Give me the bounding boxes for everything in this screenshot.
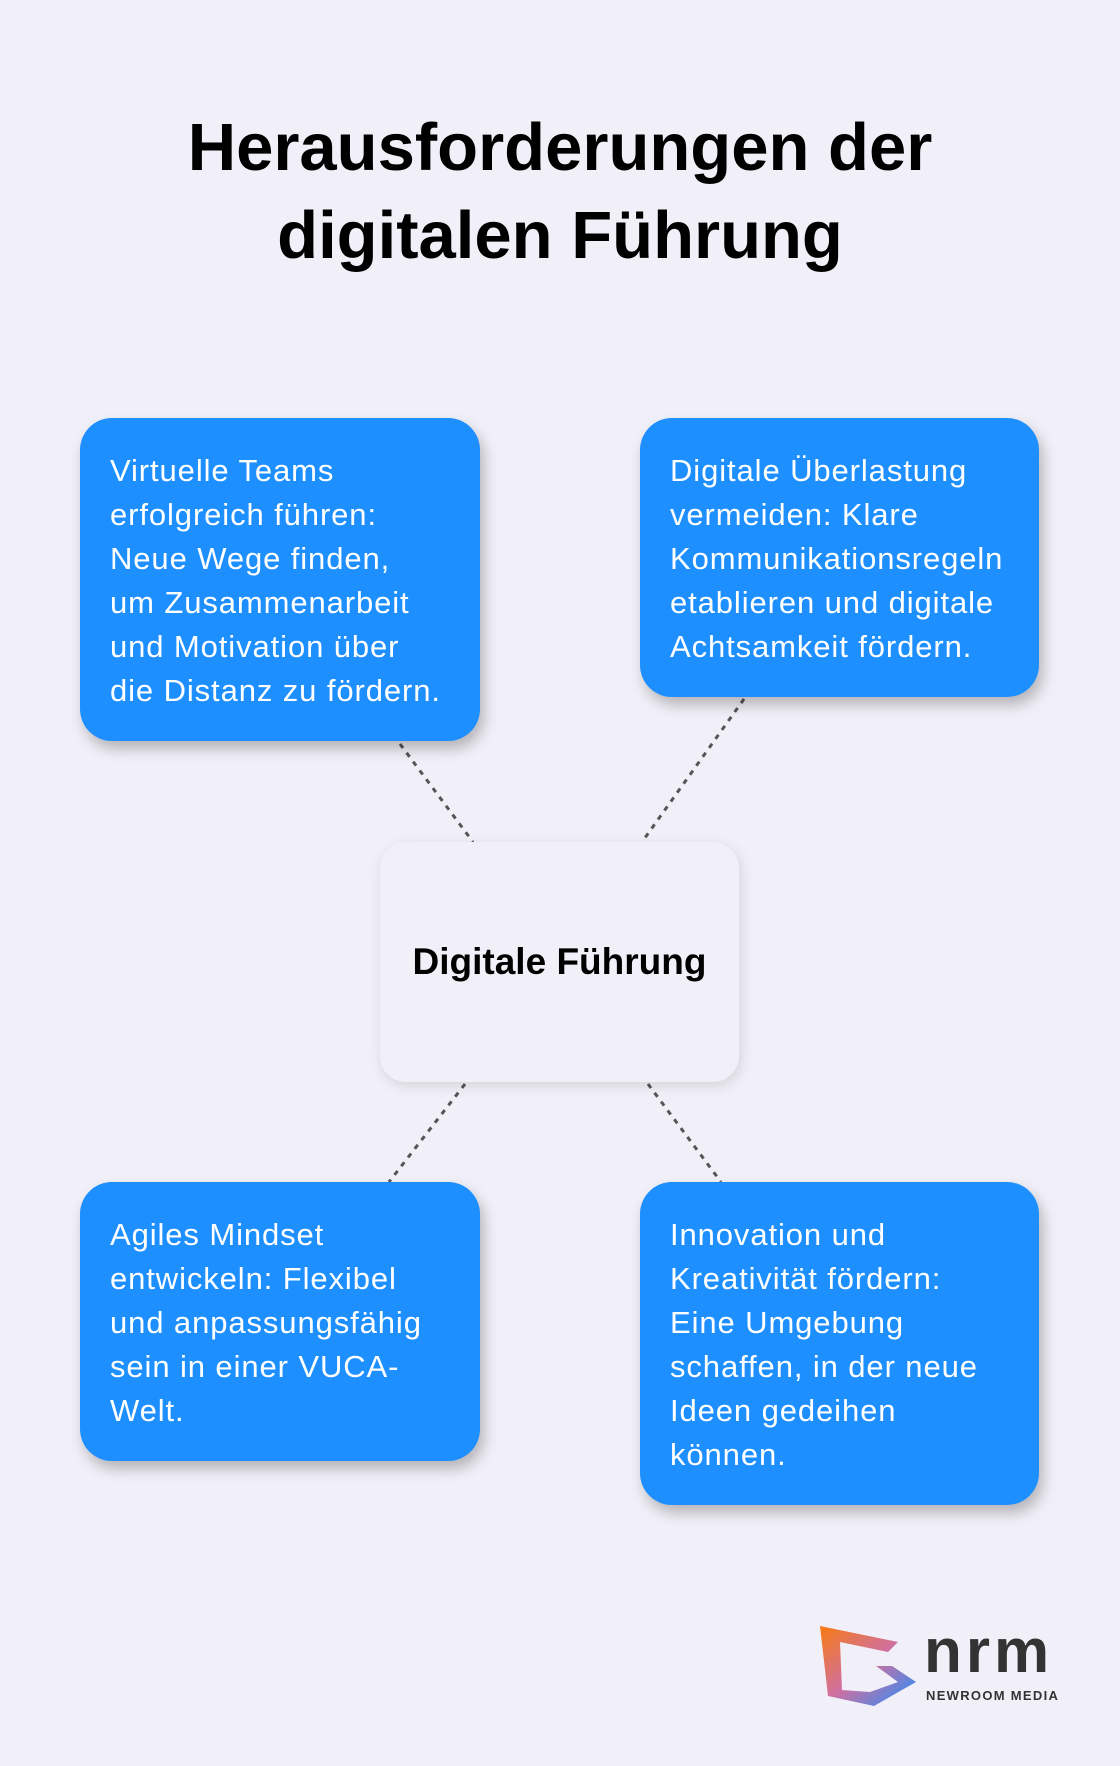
panel: digital overload: vermeiden: Klare (670, 497, 919, 532)
panel: virtual teams: Virtuelle Teams (110, 453, 334, 488)
panel: innovation: Kreativität fördern: (670, 1261, 941, 1296)
panel: innovation: Innovation und (670, 1217, 886, 1252)
panel: virtual teams: Neue Wege finden, (110, 541, 390, 576)
title: digitalen Führung (277, 198, 843, 273)
panel: agile mindset: Welt. (110, 1393, 185, 1428)
panel: innovation (640, 1182, 1039, 1505)
panel: virtual teams: die Distanz zu fördern. (110, 673, 441, 708)
panel: digital overload: Kommunikationsregeln (670, 541, 1003, 576)
panel: virtual teams: um Zusammenarbeit (110, 585, 410, 620)
title: Herausforderungen der (188, 110, 932, 185)
panel: digital overload (640, 418, 1039, 697)
panel: innovation: schaffen, in der neue (670, 1349, 978, 1384)
panel: digital overload: etablieren und digitale (670, 585, 994, 620)
panel: digital overload: Achtsamkeit fördern. (670, 629, 972, 664)
panel: innovation: können. (670, 1437, 787, 1472)
logo (820, 1617, 1059, 1706)
panel: agile mindset: und anpassungsfähig (110, 1305, 422, 1340)
panel: agile mindset: entwickeln: Flexibel (110, 1261, 397, 1296)
panel: agile mindset (80, 1182, 480, 1461)
panel: virtual teams: erfolgreich führen: (110, 497, 377, 532)
panel: innovation: Ideen gedeihen (670, 1393, 896, 1428)
panel: agile mindset: sein in einer VUCA- (110, 1349, 399, 1384)
center node (380, 842, 739, 1082)
center node: Digitale Führung (413, 941, 706, 982)
panel: digital overload: Digitale Überlastung (670, 453, 967, 488)
panel: virtual teams: und Motivation über (110, 629, 399, 664)
logo: NEWROOM MEDIA (926, 1688, 1059, 1703)
panel: innovation: Eine Umgebung (670, 1305, 904, 1340)
panel: agile mindset: Agiles Mindset (110, 1217, 324, 1252)
panel: virtual teams (80, 418, 480, 741)
title (188, 110, 932, 273)
icon: nrm logo mark (820, 1626, 916, 1706)
logo text: nrm (924, 1617, 1053, 1686)
